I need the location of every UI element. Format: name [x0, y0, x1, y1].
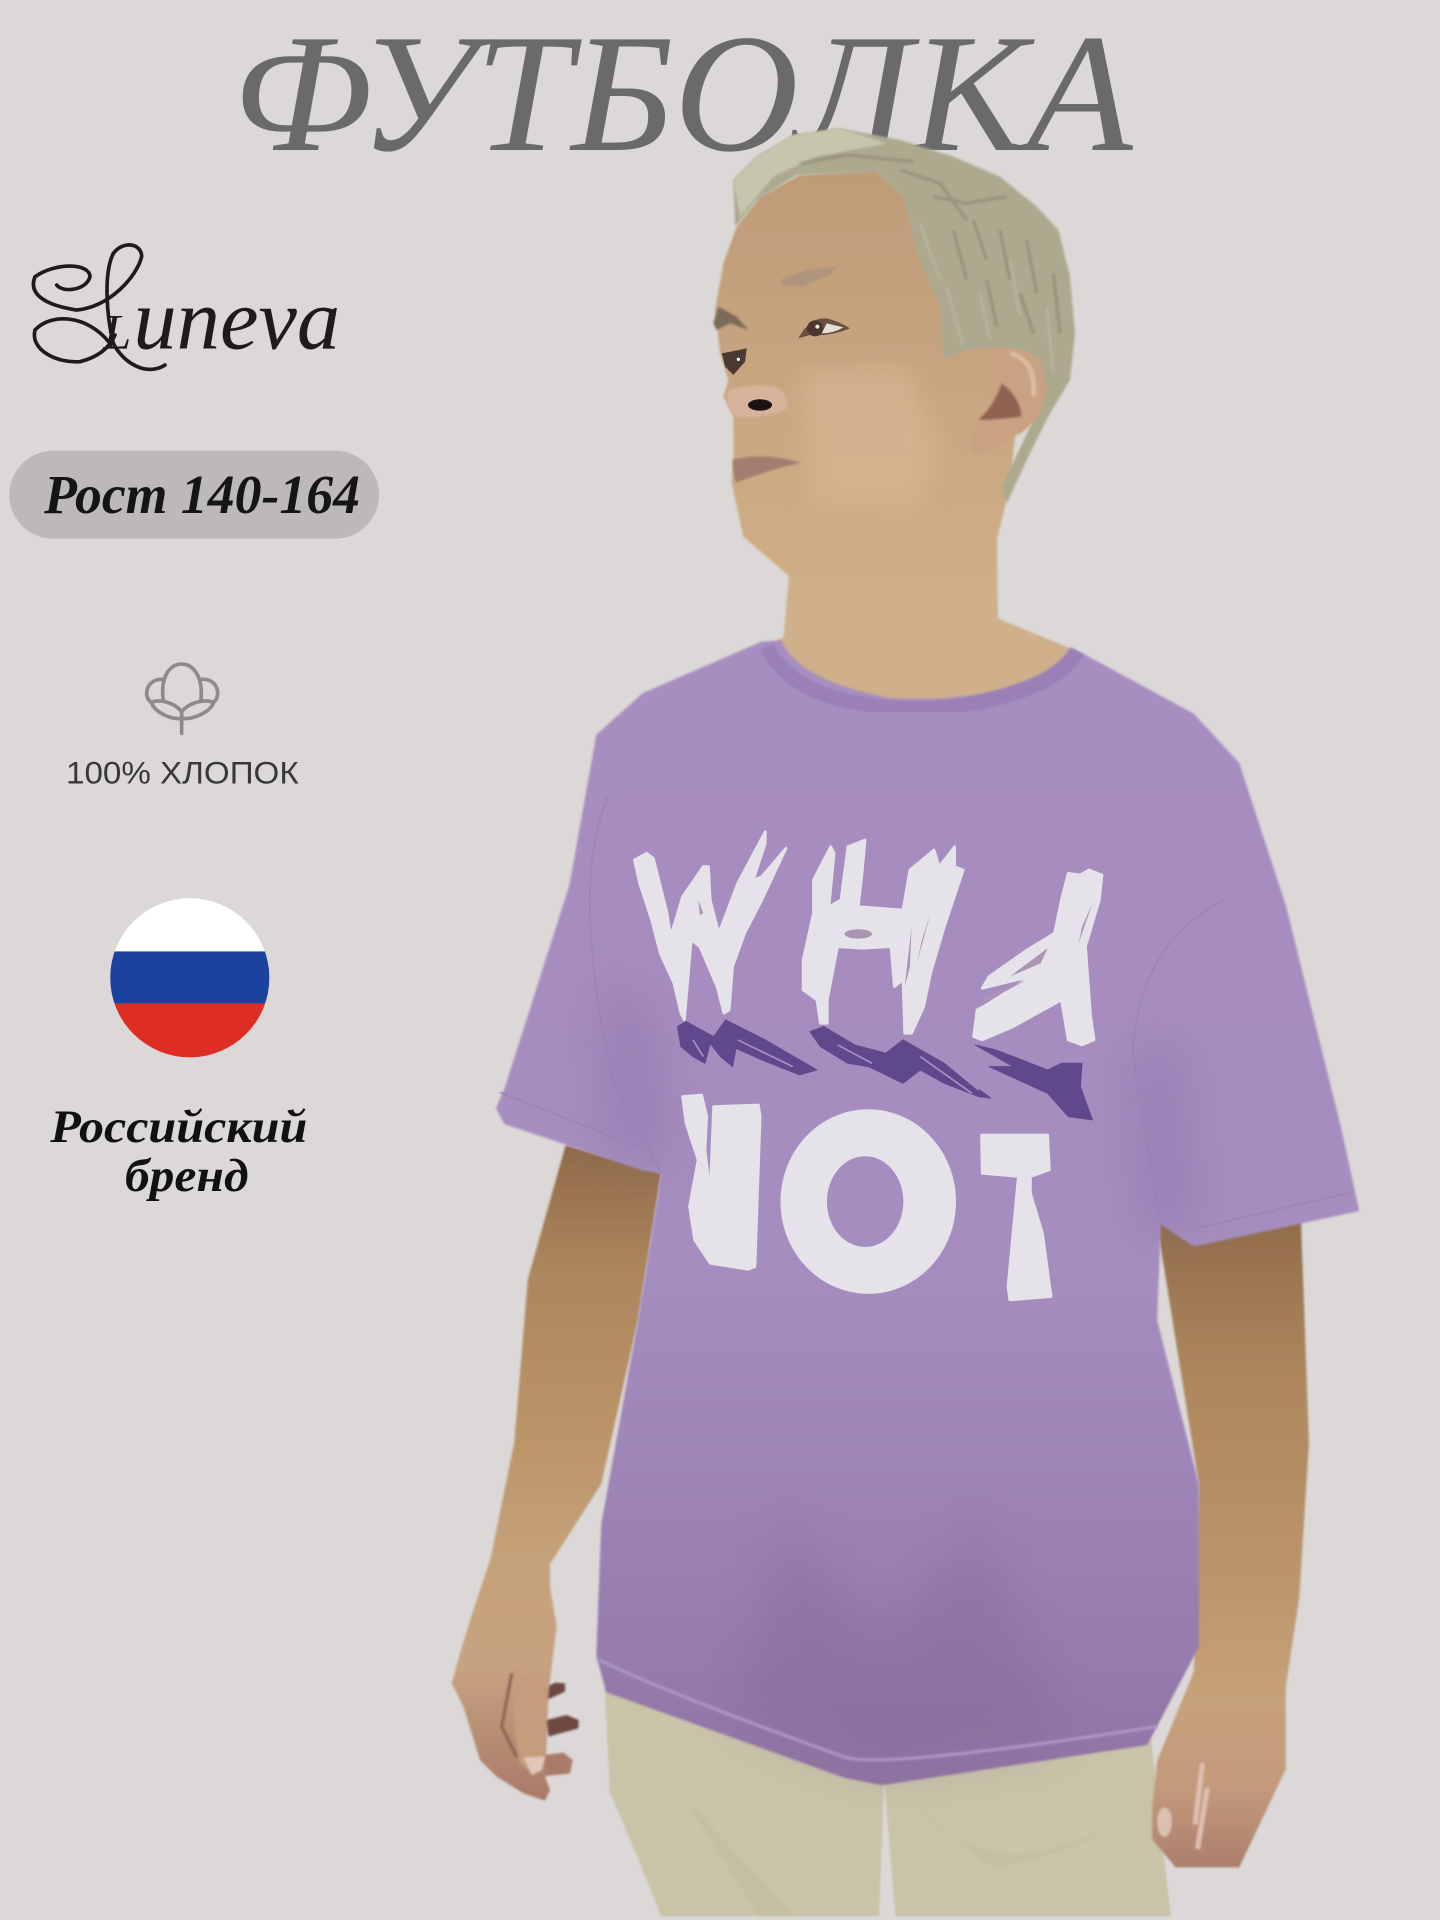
collar ribbing	[767, 647, 1078, 709]
print letters	[634, 832, 1102, 1300]
title: ФУТБОЛКА	[233, 0, 1133, 187]
shirt body	[496, 640, 1359, 1785]
shirt shading	[600, 980, 1194, 1769]
hair	[733, 128, 1075, 503]
icon: russian flag	[110, 898, 269, 1058]
logo: Luneva	[33, 245, 340, 369]
sleeve and hem seams	[500, 796, 1349, 1228]
russian brand label: бренд	[125, 1151, 249, 1202]
hair strands	[800, 155, 1060, 333]
logo wordmark: L	[103, 303, 131, 359]
left eye	[722, 348, 747, 375]
neck	[765, 540, 1078, 722]
height badge	[9, 451, 379, 539]
cheek highlight	[800, 367, 940, 513]
cotton label: 100% ХЛОПОК	[66, 754, 299, 790]
nose	[727, 386, 787, 417]
head	[713, 128, 1075, 577]
left arm and hand	[452, 1145, 661, 1801]
lips	[733, 456, 802, 483]
logo wordmark: uneva	[133, 271, 340, 367]
logo flourish	[33, 245, 165, 369]
russian brand label: Российский	[49, 1102, 307, 1153]
right eyebrow	[780, 267, 837, 287]
back fingers	[547, 1683, 579, 1737]
trousers	[605, 1690, 1171, 1916]
right arm and hand	[1152, 1206, 1309, 1867]
shirt print: WHY NOT	[634, 832, 1102, 1300]
icon: cotton boll	[147, 664, 218, 733]
russian brand label	[49, 1102, 307, 1202]
print details	[698, 900, 1092, 1003]
hair front highlight	[733, 128, 887, 217]
left eyebrow	[713, 307, 748, 330]
print shadows	[677, 1020, 1092, 1120]
photo: model wearing t-shirt	[452, 128, 1359, 1916]
skin of face	[715, 170, 1020, 577]
height badge: Рост 140-164	[43, 464, 360, 525]
right eye	[798, 318, 850, 338]
thumb	[512, 1667, 547, 1775]
t-shirt	[496, 640, 1359, 1785]
palm	[452, 1560, 557, 1801]
ear	[968, 348, 1046, 453]
shadow slits	[693, 1040, 979, 1093]
